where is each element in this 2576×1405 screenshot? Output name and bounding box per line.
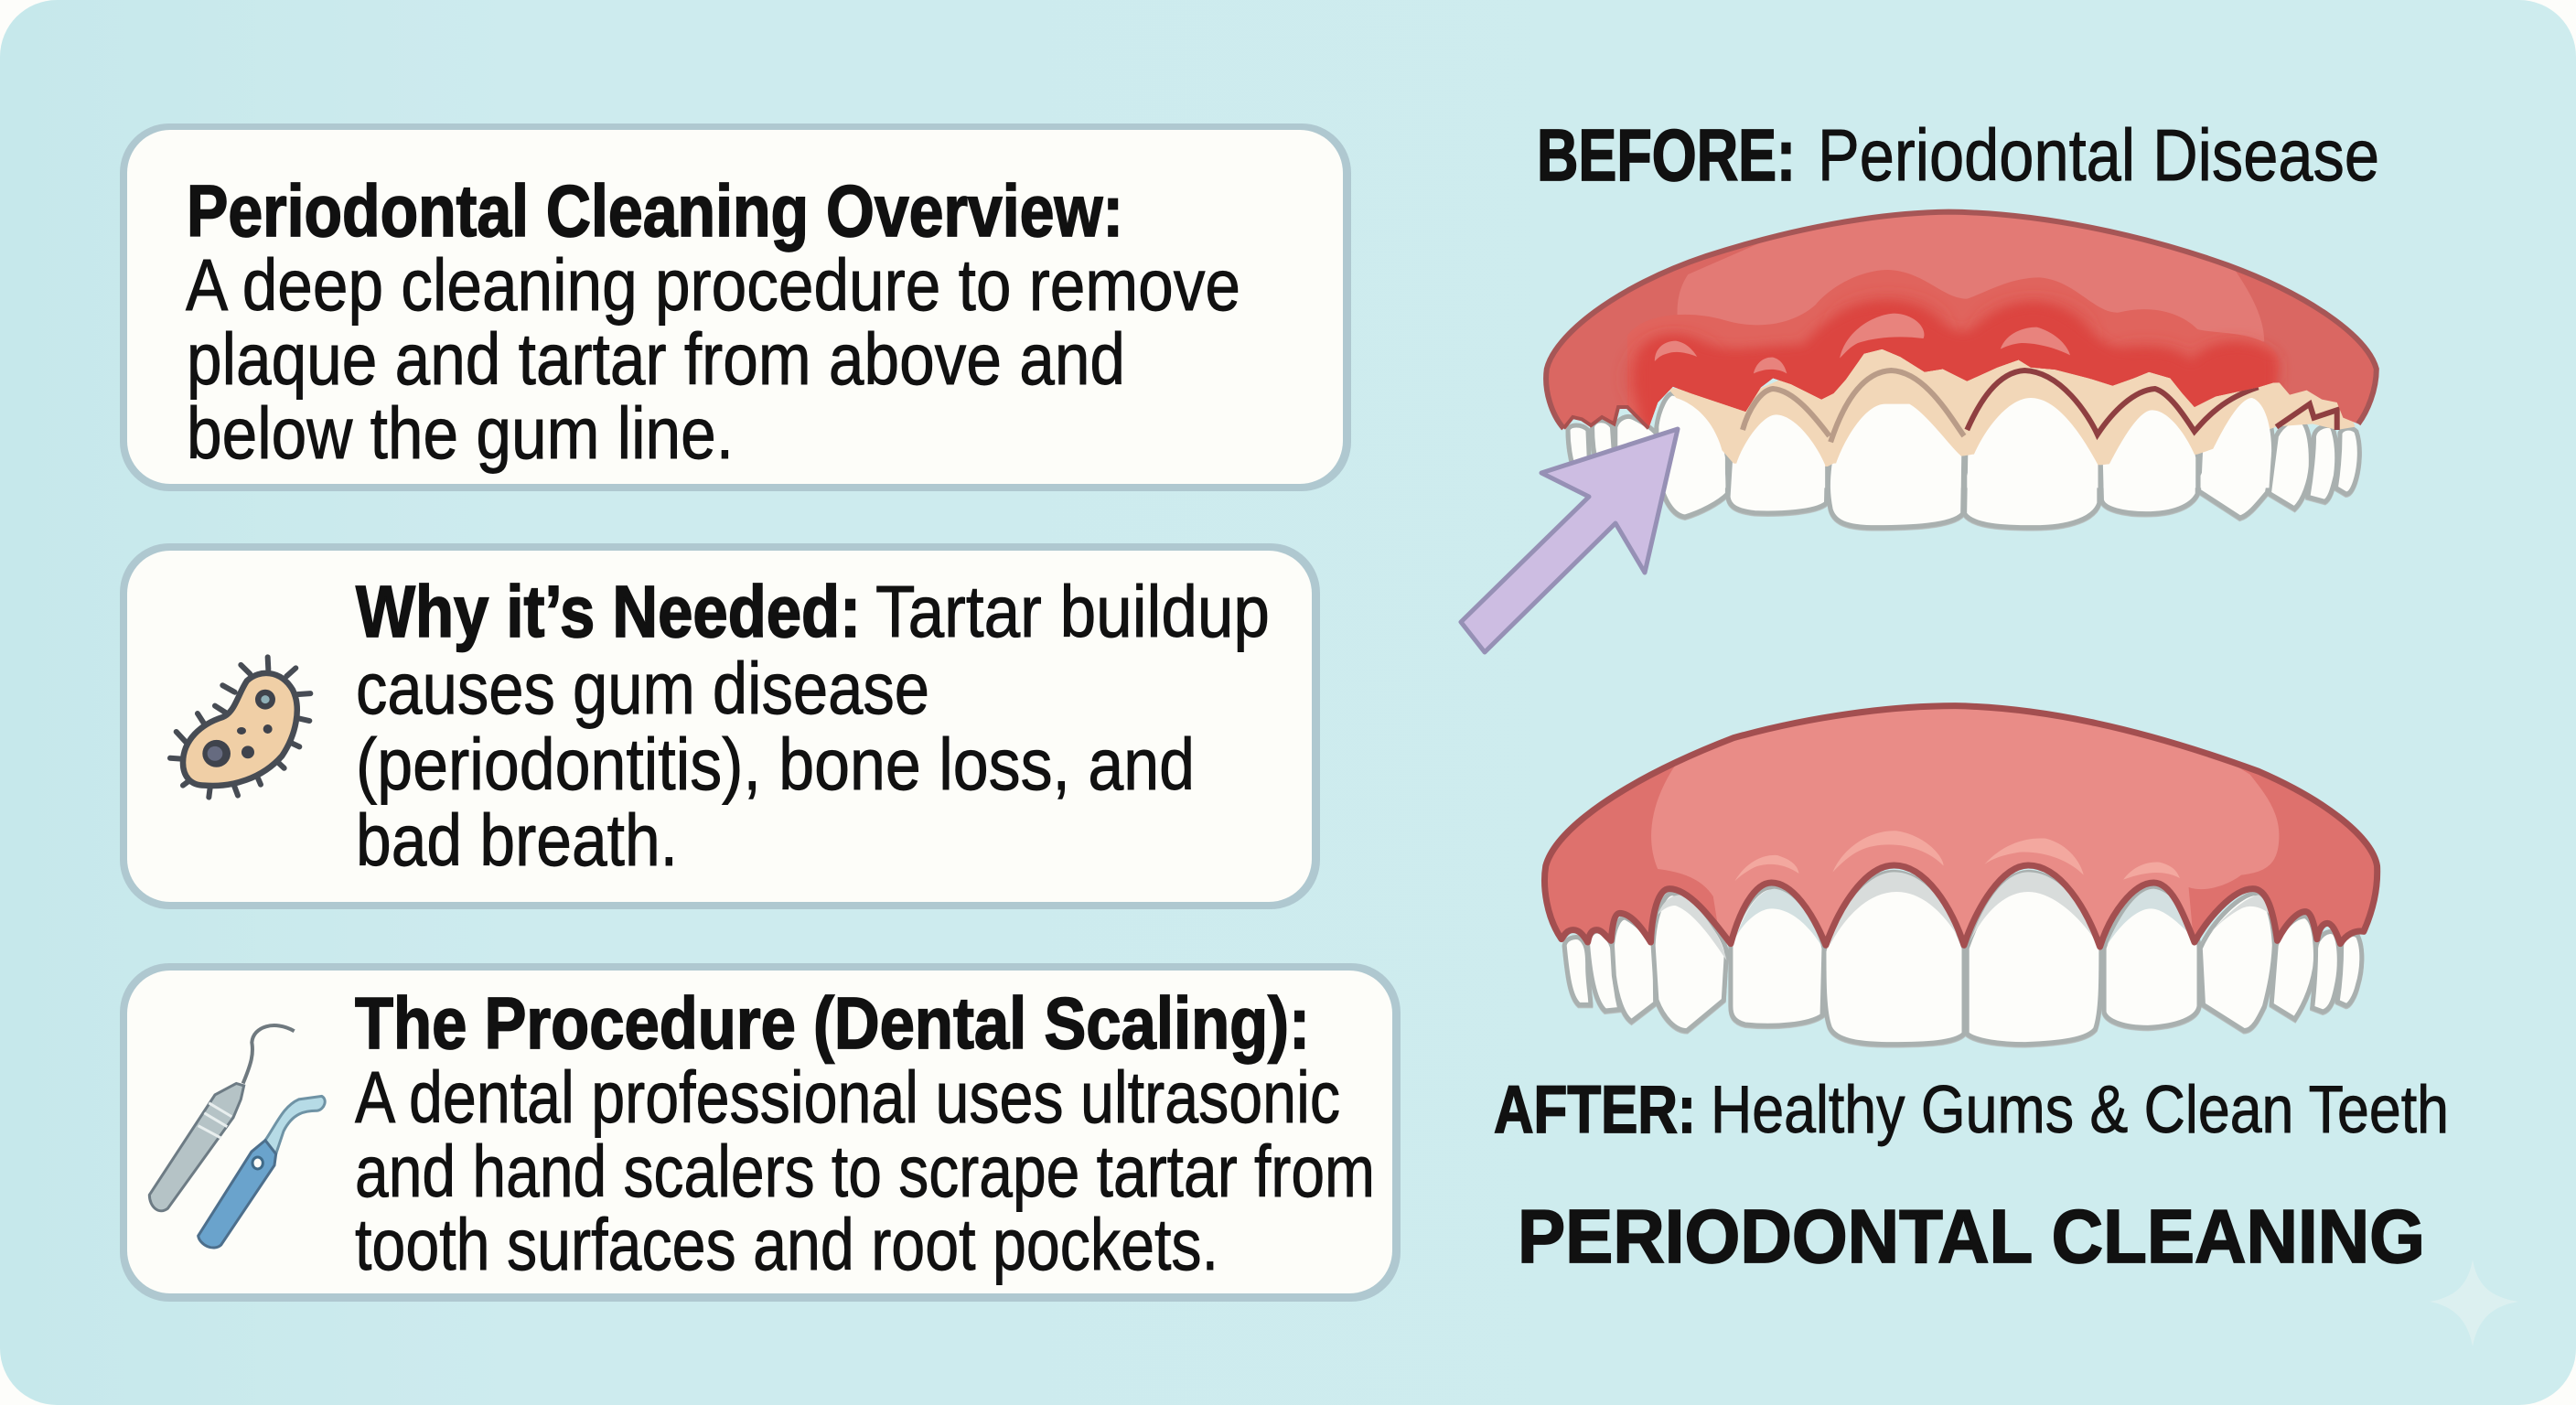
text: overview body: below the gum line. bbox=[187, 392, 734, 474]
heading: before: BEFORE: bbox=[1537, 114, 1796, 196]
icon: sparkle bbox=[2430, 1260, 2518, 1346]
text: procedure body: tooth surfaces and root pockets. bbox=[355, 1204, 1218, 1285]
text: why it's needed body: causes gum disease bbox=[356, 648, 929, 729]
text: overview body: A deep cleaning procedure to remove bbox=[186, 244, 1240, 326]
teeth with tartar bbox=[1568, 345, 2359, 528]
text: why it's needed body bbox=[356, 571, 1270, 881]
illustration: before, diseased gums and teeth bbox=[1546, 212, 2377, 528]
text: why it's needed body: bad breath. bbox=[356, 799, 678, 881]
heading: before: Periodontal Disease bbox=[1818, 114, 2379, 196]
icon: dental scalers bbox=[149, 1025, 325, 1248]
arrow pointing at gum line bbox=[1461, 429, 1678, 652]
text: why it's needed body: Tartar buildup bbox=[875, 571, 1270, 652]
icon: hand scaler bbox=[149, 1025, 295, 1211]
text: procedure body: and hand scalers to scrape tartar from bbox=[355, 1131, 1375, 1212]
text: procedure heading: The Procedure (Dental Scaling): bbox=[355, 982, 1310, 1064]
heading: after: AFTER: bbox=[1494, 1073, 1696, 1147]
title: PERIODONTAL CLEANING bbox=[1518, 1194, 2425, 1279]
heading: after bbox=[1494, 1073, 2449, 1147]
icon: ultrasonic scaler bbox=[199, 1096, 325, 1248]
healthy gums bbox=[1545, 706, 2377, 951]
panel: why it's needed bbox=[120, 543, 1320, 909]
text: overview heading: Periodontal Cleaning Overview: bbox=[187, 170, 1123, 252]
text: overview body bbox=[186, 244, 1240, 474]
text: overview body: plaque and tartar from above and bbox=[187, 318, 1125, 400]
illustration: after, healthy gums and clean teeth bbox=[1545, 706, 2377, 1045]
text: procedure body: A dental professional uses ultrasonic bbox=[355, 1056, 1340, 1138]
inflamed gums bbox=[1546, 212, 2377, 436]
panel: periodontal cleaning overview bbox=[120, 123, 1351, 491]
panel: the procedure bbox=[120, 963, 1401, 1302]
text: procedure body bbox=[355, 1056, 1375, 1285]
text: why it's needed body: (periodontitis), bone loss, and bbox=[356, 724, 1195, 805]
icon: bacterium bbox=[170, 657, 310, 798]
clean teeth bbox=[1564, 872, 2362, 1045]
text: why it's needed heading: Why it’s Needed: bbox=[356, 571, 861, 652]
heading: before bbox=[1537, 114, 2379, 196]
heading: after: Healthy Gums & Clean Teeth bbox=[1711, 1073, 2449, 1147]
